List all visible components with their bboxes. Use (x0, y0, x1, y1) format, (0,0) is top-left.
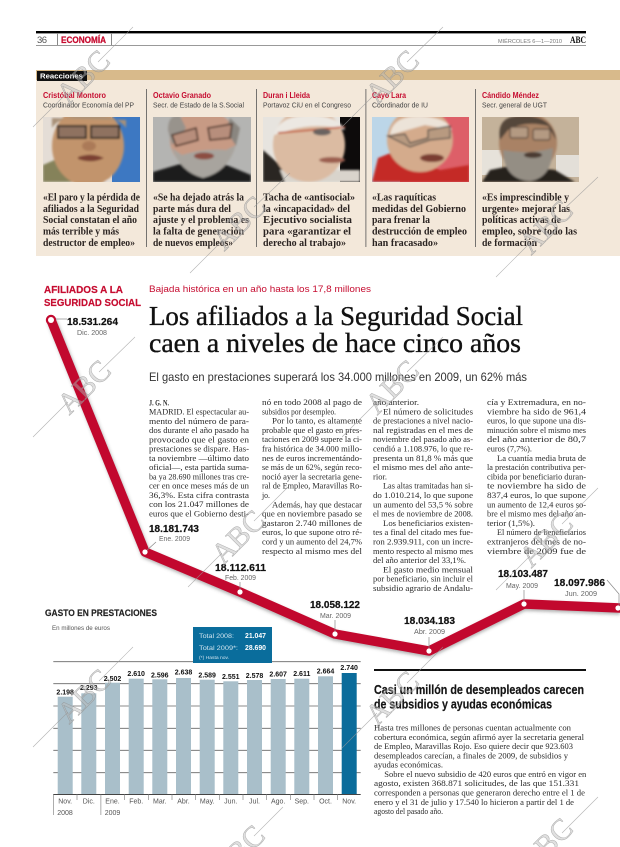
reaction: Cayo Lara: Cayo Lara (372, 91, 406, 100)
point: Jun. 2009: Jun. 2009 (565, 591, 597, 598)
column 3: tes a final del citado mes fue- (373, 527, 473, 537)
point: Ene. 2009: 18.181.743 (149, 523, 199, 535)
column 4: minución sobre el mismo mes (487, 425, 587, 435)
column 4: cía y Extremadura, en no- (487, 397, 586, 407)
column 2: nó en todo 2008 al pago de (262, 397, 362, 407)
reaction: Octavio Granado: de nuevos empleos» (153, 237, 233, 249)
column 3: de prestaciones a nivel nacio- (373, 416, 473, 426)
column 2: taciones en 2009 supere la ci- (262, 434, 362, 444)
point: Dic. 2008 (46, 315, 118, 337)
article body (149, 397, 587, 593)
reaction: Cándido Méndez: Cándido Méndez (482, 91, 539, 100)
reaction: Cándido Méndez: «Es imprescindible y (482, 192, 569, 204)
column 1: 36,3%. Esta cifra contrasta (149, 490, 249, 500)
column 2: nes de euros incrementándo- (262, 453, 362, 463)
point: Abr. 2009 (404, 615, 455, 654)
line chart: afiliados (46, 315, 620, 654)
bar chart: gasto en prestaciones: 2.198 (56, 690, 74, 697)
reaction: Octavio Granado: «Se ha dejado atrás la (153, 192, 244, 204)
reaction: Cándido Méndez: de formación (482, 237, 537, 249)
column 3: del año anterior del 33,1%. (373, 555, 466, 565)
column 2: subsidios por desempleo. (262, 406, 336, 416)
point: Dic. 2008: Dic. 2008 (77, 330, 107, 337)
point: Ene. 2009 (142, 523, 199, 555)
column 4: 837,4 euros, lo que supone (487, 490, 586, 500)
bar chart: gasto en prestaciones (53, 662, 361, 817)
column 4: viembre de 2009 fue de (487, 546, 586, 556)
bar chart: gasto en prestaciones: Jun. (224, 798, 237, 806)
column 2: gastaron 2.740 millones de (262, 518, 362, 528)
point: Mar. 2009: Mar. 2009 (320, 613, 351, 620)
column 4: del año anterior de 80,7 (487, 434, 587, 444)
watermarks: ABC (513, 507, 580, 574)
column 3: Las altas tramitadas han si- (383, 481, 473, 491)
side article text (374, 722, 587, 816)
column 3: rior. (373, 471, 387, 481)
reaction: Cristóbal Montoro: Cristóbal Montoro (43, 91, 106, 100)
bar chart: gasto en prestaciones: 2.596 (151, 672, 169, 679)
column 1: ta noviembre —último dato (149, 453, 249, 463)
reaction: Cristóbal Montoro: «El paro y la pérdida de (43, 192, 140, 204)
bar chart: gasto en prestaciones: Abr. (177, 798, 190, 806)
reaction: Octavio Granado: parte más dura del (153, 203, 231, 215)
bar chart: gasto en prestaciones: 2.607 (269, 672, 287, 679)
column 2: Por lo tanto, es altamente (272, 416, 362, 426)
column 1: MADRID. El espectacular au- (149, 406, 249, 416)
column 3: do 1.010.214, lo que supone (373, 490, 473, 500)
reaction: Duran i Lleida: derecho al trabajo» (263, 237, 346, 249)
watermarks: ABC (359, 665, 426, 732)
column 1: dos durante el año pasado ha (149, 425, 249, 435)
reaction: Octavio Granado: Secr. de Estado de la S.Social (153, 100, 244, 110)
reaction: Cayo Lara: destrucción de empleo (372, 226, 467, 238)
column 2: fra histórica de 34.000 millo- (262, 444, 362, 454)
column 2: cord y un aumento del 24,7% (262, 536, 362, 546)
reaction: Octavio Granado: Octavio Granado (153, 91, 211, 100)
reaction: Octavio Granado: ajuste y el problema es (153, 214, 250, 226)
side article text: agosto, existen 368.871 solicitudes, de las que 151.331 (374, 778, 579, 788)
side article heading: de subsidios y ayudas económicas (374, 698, 552, 712)
watermarks: ABC (359, 354, 426, 421)
column 3 (373, 397, 474, 593)
reaction: Duran i Lleida: Tacha de «antisocial» (263, 192, 355, 204)
bar chart: gasto en prestaciones: 2.502 (104, 676, 121, 683)
point: Abr. 2009: 18.034.183 (404, 615, 455, 627)
reaction: Cristóbal Montoro: Social constatan el año (43, 214, 137, 226)
column 3: Los beneficiarios existen- (383, 518, 473, 528)
column 4: euros, lo que supone una dis- (487, 416, 586, 426)
headline: Los afiliados a la Seguridad Social (149, 300, 523, 331)
column 2: que en noviembre pasado se (262, 509, 362, 519)
bar chart: gasto en prestaciones: 2.551 (222, 674, 240, 681)
bar chart: gasto en prestaciones: 2.578 (246, 673, 263, 680)
watermarks: ABC (205, 504, 272, 571)
reaction: Cristóbal Montoro: destructor de empleo» (43, 237, 135, 249)
bar chart: gasto en prestaciones: Nov. (58, 798, 72, 806)
photo: Méndez (482, 113, 579, 182)
bar chart: gasto en prestaciones: Sep. (295, 798, 309, 806)
reaction: Cándido Méndez: Secr. general de UGT (482, 100, 547, 110)
column 1: mento del número de para- (149, 416, 249, 426)
point: Dic. 2008: 18.531.264 (67, 316, 118, 328)
reaction: Cayo Lara: medidas del Gobierno (372, 203, 466, 215)
column 4: terior (1,5%). (487, 518, 535, 528)
column 4: la prestación contributiva per- (487, 462, 586, 472)
chart title: afiliados (44, 284, 142, 309)
column 2: Además, hay que destacar (272, 499, 362, 509)
column 3: El gasto medio mensual (383, 564, 474, 574)
reaction: Duran i Lleida: la «incapacidad» del (263, 203, 350, 215)
column 1: con los 21.047 millones de (149, 499, 249, 509)
page header: MIÉRCOLES 6—1—2010 (498, 38, 562, 45)
column 3: por beneficiario, sin incluir el (373, 574, 474, 584)
column 3: El número de solicitudes (383, 406, 474, 416)
photo: Granado (153, 110, 251, 182)
column 1: prestaciones se dispare. Has- (149, 444, 249, 454)
reaction: Cristóbal Montoro: afiliados a la Seguridad (43, 203, 139, 215)
column 1: J. G. N. (149, 398, 169, 408)
photo: Lara (372, 117, 469, 182)
side article heading: Casi un millón de desempleados carecen (374, 683, 584, 697)
reaction: Duran i Lleida: Portavoz CiU en el Congreso (263, 100, 351, 110)
bar chart heading (45, 608, 157, 632)
reaction: Duran i Lleida: para «garantizar el (263, 226, 351, 238)
point: Jun. 2009: 18.097.986 (554, 577, 605, 589)
reaction: Cayo Lara: han fracasado» (372, 237, 438, 249)
side article text: corresponden a personas que generaron derecho entre el 1 de (374, 788, 585, 798)
column 3: un aumento del 53,5 % sobre (373, 499, 473, 509)
subheading: El gasto en prestaciones superará los 34.000 millones en 2009, un 62% más (149, 370, 527, 384)
kicker: Bajada histórica en un año hasta los 17,8 millones (149, 284, 371, 295)
bar chart: gasto en prestaciones: 2.610 (127, 671, 145, 678)
headline: caen a niveles de hace cinco años (149, 327, 521, 358)
reaction: Duran i Lleida (263, 91, 360, 249)
column 4: extranjeros del mes de no- (487, 536, 586, 546)
column 2: probable que el gasto en pres- (262, 425, 362, 435)
watermarks: ABC (359, 44, 426, 111)
point: Abr. 2009: Abr. 2009 (414, 629, 445, 636)
column 4: euros (7,7%). (487, 444, 532, 454)
reaction: Duran i Lleida: Duran i Lleida (263, 91, 310, 100)
point: May. 2009: May. 2009 (506, 583, 538, 590)
bar chart: gasto en prestaciones: Mar. (153, 798, 167, 806)
watermarks: ABC (513, 194, 580, 261)
panel: reacciones (36, 70, 620, 256)
reaction: Cayo Lara: para frenar la (372, 214, 430, 226)
point: Feb. 2009: Feb. 2009 (225, 575, 256, 582)
column 3: cendió a 1.108.976, lo que re- (373, 444, 473, 454)
watermarks: ABC (51, 354, 118, 421)
reaction: Duran i Lleida: Ejecutivo socialista (263, 214, 352, 226)
side article text: de Empleo, Maravillas Rojo. Eso quiere decir que 923.603 (374, 741, 573, 751)
bar chart: gasto en prestaciones: Dic. (83, 798, 95, 806)
column 3: ron 2.939.911, con un incre- (373, 536, 473, 546)
column 3: noviembre del pasado año as- (373, 434, 473, 444)
callout: totales: 21.047 (245, 633, 266, 640)
bar chart: gasto en prestaciones: May. (200, 798, 215, 806)
bar chart: gasto en prestaciones: Feb. (129, 798, 143, 806)
point: Ene. 2009: Ene. 2009 (159, 536, 190, 543)
side article text: cobertura económica, según afirmó ayer la secretaria general (374, 732, 585, 742)
side article text: ayudas económicas. (374, 760, 443, 770)
column 2 (261, 397, 363, 556)
photo: Montoro (43, 117, 140, 182)
chart title: afiliados: AFILIADOS A LA (44, 284, 123, 296)
column 4: cibida por beneficiario duran- (487, 471, 586, 481)
bar chart: gasto en prestaciones: 2.740 (340, 665, 358, 672)
bar chart: gasto en prestaciones: 2009 (105, 810, 120, 817)
column 4: El número de beneficiarios (497, 527, 587, 537)
reaction: Cristóbal Montoro (43, 91, 140, 249)
bar chart: gasto en prestaciones: Jul. (249, 798, 260, 806)
reaction: Octavio Granado (153, 91, 251, 249)
reaction: Cristóbal Montoro: Coordinador Economía del PP (43, 100, 134, 110)
watermarks: ABC (206, 190, 273, 257)
bar chart: gasto en prestaciones: 2.293 (80, 685, 98, 692)
reaction: Cándido Méndez: empleo, sobre todo las (482, 226, 578, 238)
bar chart heading: GASTO EN PRESTACIONES (45, 608, 157, 618)
column 2: jo. (261, 490, 270, 500)
point: May. 2009: 18.103.487 (498, 568, 548, 580)
chart title: afiliados: SEGURIDAD SOCIAL (44, 297, 142, 309)
side article text: desempleados carecían, a finales de 2009, de subsidios y (374, 750, 569, 760)
side article heading (374, 683, 584, 712)
callout: totales: (*) Hasta nov. (199, 655, 229, 660)
column 2: ral de Empleo, Maravillas Ro- (262, 481, 362, 491)
bar chart: gasto en prestaciones: 2.638 (175, 670, 192, 677)
column 4: viembre ha sido de 961,4 (487, 406, 587, 416)
point: Mar. 2009 (310, 599, 360, 637)
column 1 (149, 398, 250, 518)
callout: totales: Total 2009*: (199, 645, 238, 652)
bar chart: gasto en prestaciones: Ago. (271, 798, 285, 806)
photo: Duran (263, 117, 360, 182)
callout: totales: 28.690 (245, 645, 266, 652)
column 3: nal registradas en el mes de (373, 425, 473, 435)
reaction: Cándido Méndez: urgente» mejorar las (482, 203, 571, 215)
column 4 (487, 397, 587, 556)
reaction: Cristóbal Montoro: más terrible y más (43, 226, 120, 238)
column 1: cer en once meses más de un (149, 481, 250, 491)
column 3: el mismo mes del año ante- (373, 462, 473, 472)
headline (149, 300, 523, 358)
reaction: Cándido Méndez: políticas activas de (482, 214, 561, 226)
page header (36, 31, 586, 46)
side article text: Sobre el nuevo subsidio de 420 euros que entró en vigor en (384, 769, 587, 779)
column 3: año anterior. (373, 397, 419, 407)
column 4: bre el mismo mes del año an- (487, 509, 586, 519)
page header: ABC (570, 35, 586, 45)
column 2: noció ayer la secretaria gene- (262, 471, 362, 481)
watermarks: ABC (50, 44, 117, 111)
column 1: euros que el Gobierno desti- (149, 508, 249, 518)
bar chart: gasto en prestaciones: 2.664 (317, 668, 334, 675)
point: May. 2009 (498, 568, 548, 607)
bar chart heading: En millones de euros (52, 625, 111, 632)
side article (374, 669, 587, 816)
column 1: oficial—, esta partida suma- (149, 462, 249, 472)
column 3: el mes de noviembre de 2008. (373, 509, 473, 519)
bar chart: gasto en prestaciones: Oct. (319, 798, 332, 806)
column 2: respecto al mismo mes del (262, 546, 363, 556)
page header: 36 (37, 35, 47, 46)
column 4: te noviembre ha sido de (487, 481, 586, 491)
point: Feb. 2009: 18.112.611 (215, 562, 266, 574)
label: Reacciones: Reacciones (40, 72, 83, 80)
bar chart: gasto en prestaciones: 2.589 (198, 673, 216, 680)
column 3: mento respecto al mismo mes (373, 546, 474, 556)
bar chart: gasto en prestaciones: Nov. (342, 798, 356, 806)
column 2: euros, lo que supone otro ré- (262, 527, 362, 537)
reaction: Octavio Granado: la falta de generación (153, 226, 244, 238)
column 3: presenta un 81,8 % más que (373, 453, 473, 463)
column 3: subsidio agrario de Andalu- (373, 583, 473, 593)
point: Jun. 2009 (554, 577, 620, 611)
reaction: Cayo Lara: «Las raquíticas (372, 192, 437, 204)
side article text: enero y el 31 de julio y 17.540 lo hicieron a partir del 1 de (374, 797, 574, 807)
reaction: Cándido Méndez (482, 91, 579, 249)
column 4: un aumento de 12,4 euros so- (487, 499, 586, 509)
callout: totales: Total 2008: (199, 633, 234, 640)
bar chart: gasto en prestaciones: 2.611 (293, 671, 310, 678)
callout: totales (193, 627, 272, 663)
page header: ECONOMÍA (61, 35, 106, 45)
point: Feb. 2009 (215, 562, 266, 595)
column 4: La cuantía media bruta de (497, 453, 586, 463)
side article text: agosto del pasado año. (374, 806, 443, 816)
watermarks: ABC (51, 663, 118, 730)
side article text: Hasta tres millones de personas cuentan actualmente con (374, 722, 572, 732)
column 2: se más de un 62%, según reco- (262, 462, 362, 472)
column 1: provocado que el gasto en (149, 434, 250, 444)
point: Mar. 2009: 18.058.122 (310, 599, 360, 611)
bar chart: gasto en prestaciones: 2008 (57, 810, 73, 817)
bar chart: gasto en prestaciones: Ene. (105, 798, 120, 806)
column 1: ba ya 28.690 millones tras cre- (149, 471, 249, 481)
reaction: Cayo Lara (372, 91, 469, 249)
reaction: Cayo Lara: Coordinador de IU (372, 100, 428, 110)
